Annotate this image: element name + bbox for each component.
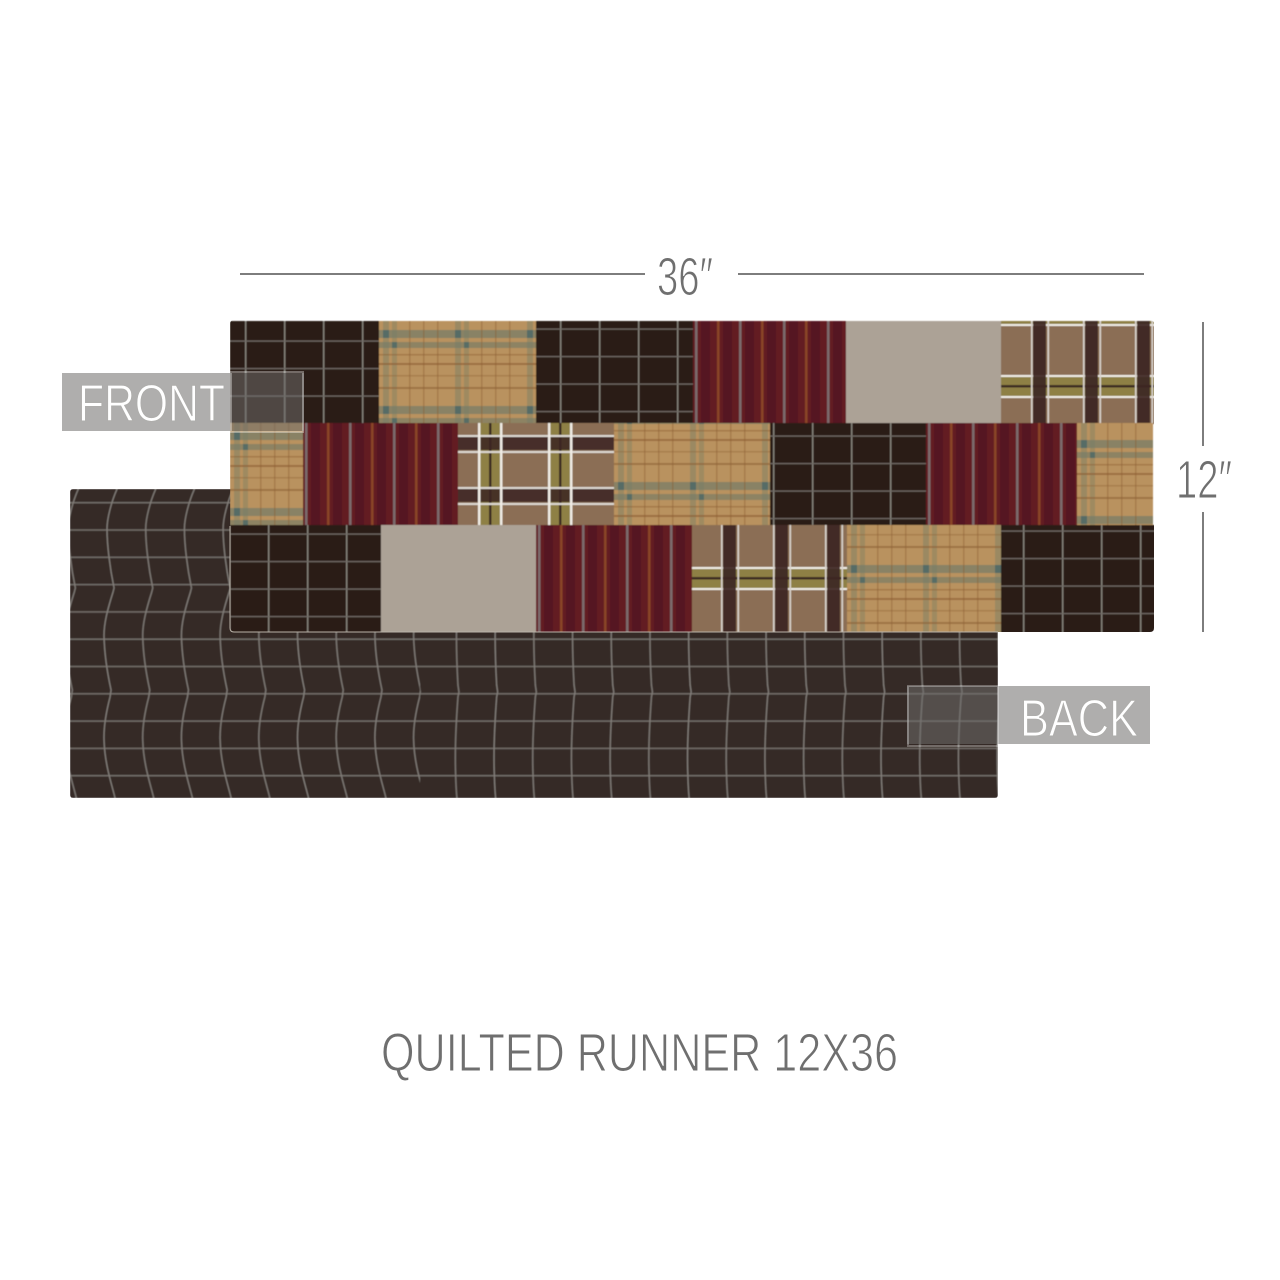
title: product caption: QUILTED RUNNER 12X36 [381,1023,898,1083]
panel: back of runner [70,489,998,798]
label: FRONT: FRONT [78,375,225,433]
dimension: width 36 inches: 36″ [657,247,713,307]
label: BACK [907,686,1150,748]
row 1 patches [230,321,1155,424]
quilt edge stitching over back [230,526,998,632]
row 2 patches [230,423,1153,526]
dimension: height 12 inches: 12″ [1176,450,1232,510]
label: BACK: BACK [1020,690,1138,748]
panel: front of runner, patchwork [230,321,1155,633]
row 3 patches [230,525,1155,633]
